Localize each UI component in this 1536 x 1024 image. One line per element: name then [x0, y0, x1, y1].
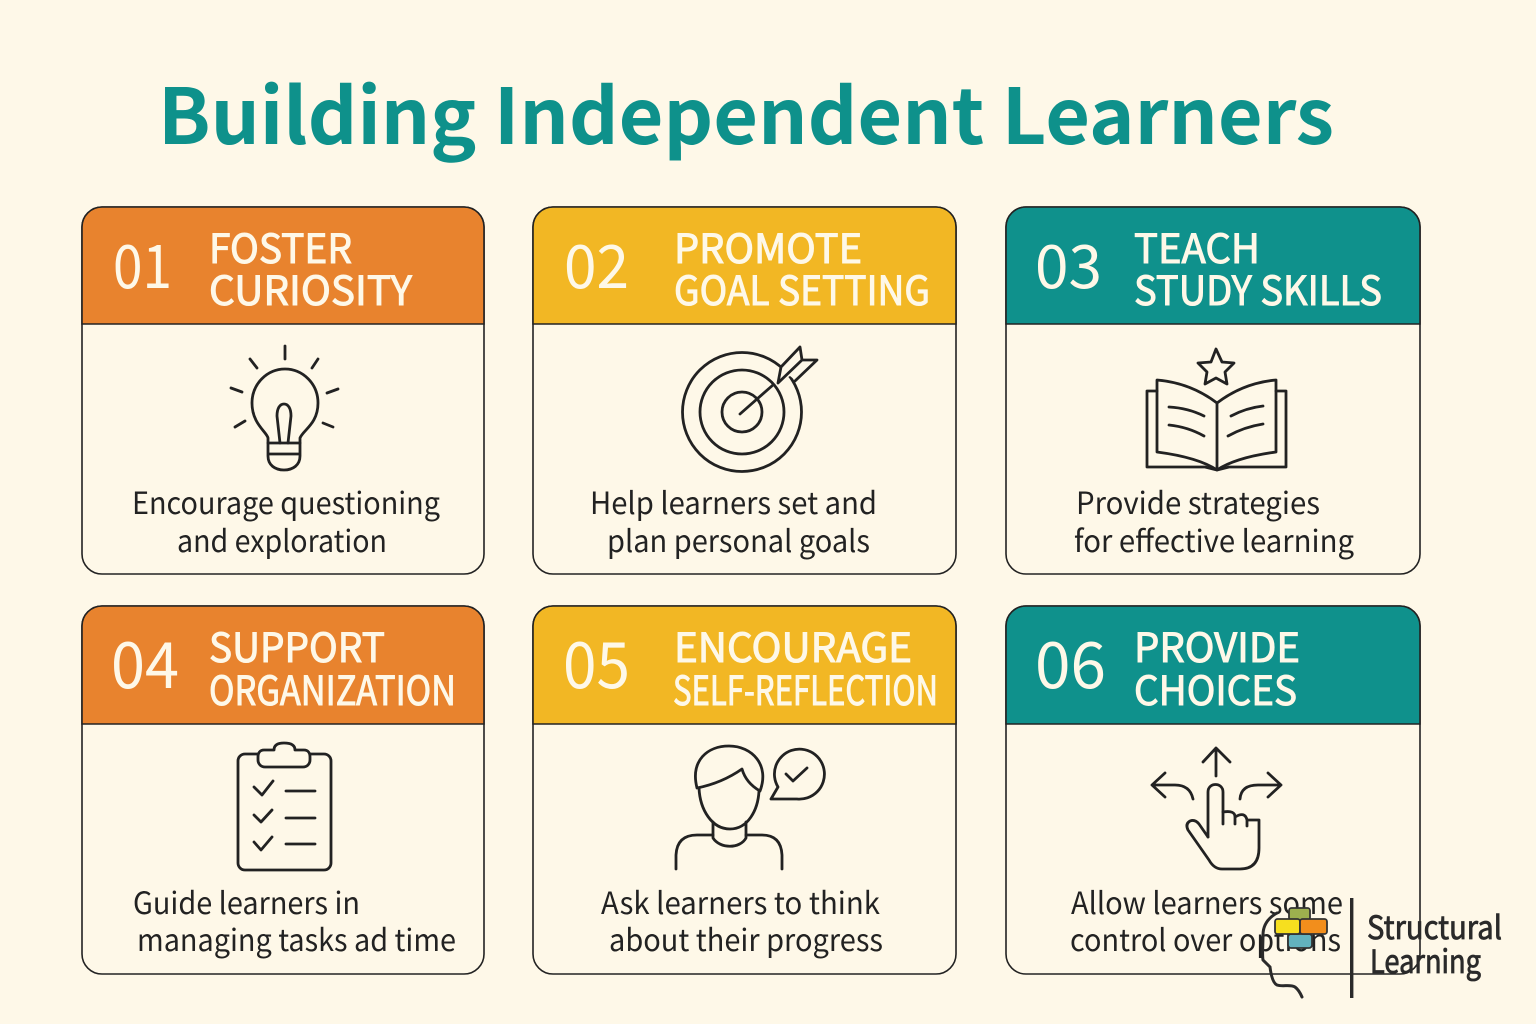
heading: foster curiosity [209, 217, 413, 317]
logo blocks [1275, 908, 1327, 948]
heading: provide choices: PROVIDE [1134, 616, 1300, 674]
heading: support organization: ORGANIZATION [209, 659, 456, 717]
heading: foster curiosity: FOSTER [209, 217, 352, 275]
number 01: 01 [113, 219, 172, 306]
number 05: 05 [563, 615, 630, 707]
heading: support organization: SUPPORT [209, 616, 385, 674]
logo wordmark: Structural [1367, 903, 1502, 949]
description: card 3: Provide strategies [1076, 479, 1320, 523]
number 02: 02 [564, 219, 629, 306]
description: card 1 [132, 479, 440, 561]
heading: teach study skills: TEACH [1134, 217, 1260, 275]
heading: promote goal setting: PROMOTE [674, 217, 862, 275]
heading: encourage self-reflection [673, 616, 938, 717]
heading: foster curiosity: CURIOSITY [209, 259, 413, 317]
description: card 6: control over options [1070, 916, 1341, 960]
description: card 5: about their progress [609, 916, 883, 960]
header band: card 5 [533, 606, 956, 724]
heading: provide choices [1134, 616, 1300, 717]
description: card 2 [590, 479, 877, 561]
panel: support organization [82, 606, 484, 974]
icon: target with arrow [682, 347, 817, 472]
heading: encourage self-reflection: ENCOURAGE [674, 616, 912, 674]
header band: card 1 [82, 207, 484, 324]
description: card 2: Help learners set and [590, 479, 877, 523]
description: card 6 [1070, 879, 1343, 960]
logo wordmark: Learning [1370, 937, 1481, 983]
header band: card 6 [1006, 606, 1420, 724]
number 04: 04 [111, 615, 179, 707]
icon: person with speech bubble [676, 746, 824, 869]
description: card 2: plan personal goals [607, 517, 870, 561]
heading: promote goal setting: GOAL SETTING [674, 259, 930, 317]
heading: teach study skills: STUDY SKILLS [1134, 259, 1382, 317]
number 03: 03 [1035, 219, 1102, 306]
logo: Structural Learning [1263, 898, 1502, 998]
title: Building Independent Learners [158, 56, 1334, 167]
logo wordmark [1367, 903, 1502, 983]
description: card 4 [133, 879, 456, 960]
description: card 1: Encourage questioning [132, 479, 440, 523]
icon: light bulb [231, 346, 338, 470]
number 06: 06 [1035, 615, 1106, 707]
description: card 6: Allow learners some [1071, 879, 1343, 923]
panel: teach study skills [1006, 207, 1420, 574]
description: card 3 [1074, 479, 1354, 561]
heading: provide choices: CHOICES [1134, 659, 1297, 717]
heading: encourage self-reflection: SELF-REFLECTION [673, 659, 938, 717]
description: card 5: Ask learners to think [601, 879, 880, 923]
header band: card 2 [533, 207, 956, 324]
heading: support organization [209, 616, 456, 717]
description: card 4: Guide learners in [133, 879, 360, 923]
description: card 3: for effective learning [1074, 517, 1354, 561]
panel: promote goal setting [533, 207, 956, 574]
description: card 5 [601, 879, 883, 960]
heading: teach study skills [1134, 217, 1382, 317]
panel: provide choices [1006, 606, 1420, 974]
panel: encourage self-reflection [533, 606, 956, 974]
icon: pointing hand with three arrows [1152, 748, 1281, 869]
header band: card 3 [1006, 207, 1420, 324]
header band: card 4 [82, 606, 484, 724]
description: card 4: managing tasks ad time [137, 916, 456, 960]
icon: open book with star [1147, 349, 1286, 470]
icon: clipboard checklist [238, 743, 331, 870]
description: card 1: and exploration [177, 517, 387, 561]
logo head outline [1263, 913, 1302, 997]
heading: promote goal setting [674, 217, 930, 317]
logo divider [1350, 898, 1353, 998]
panel: foster curiosity [82, 207, 484, 574]
